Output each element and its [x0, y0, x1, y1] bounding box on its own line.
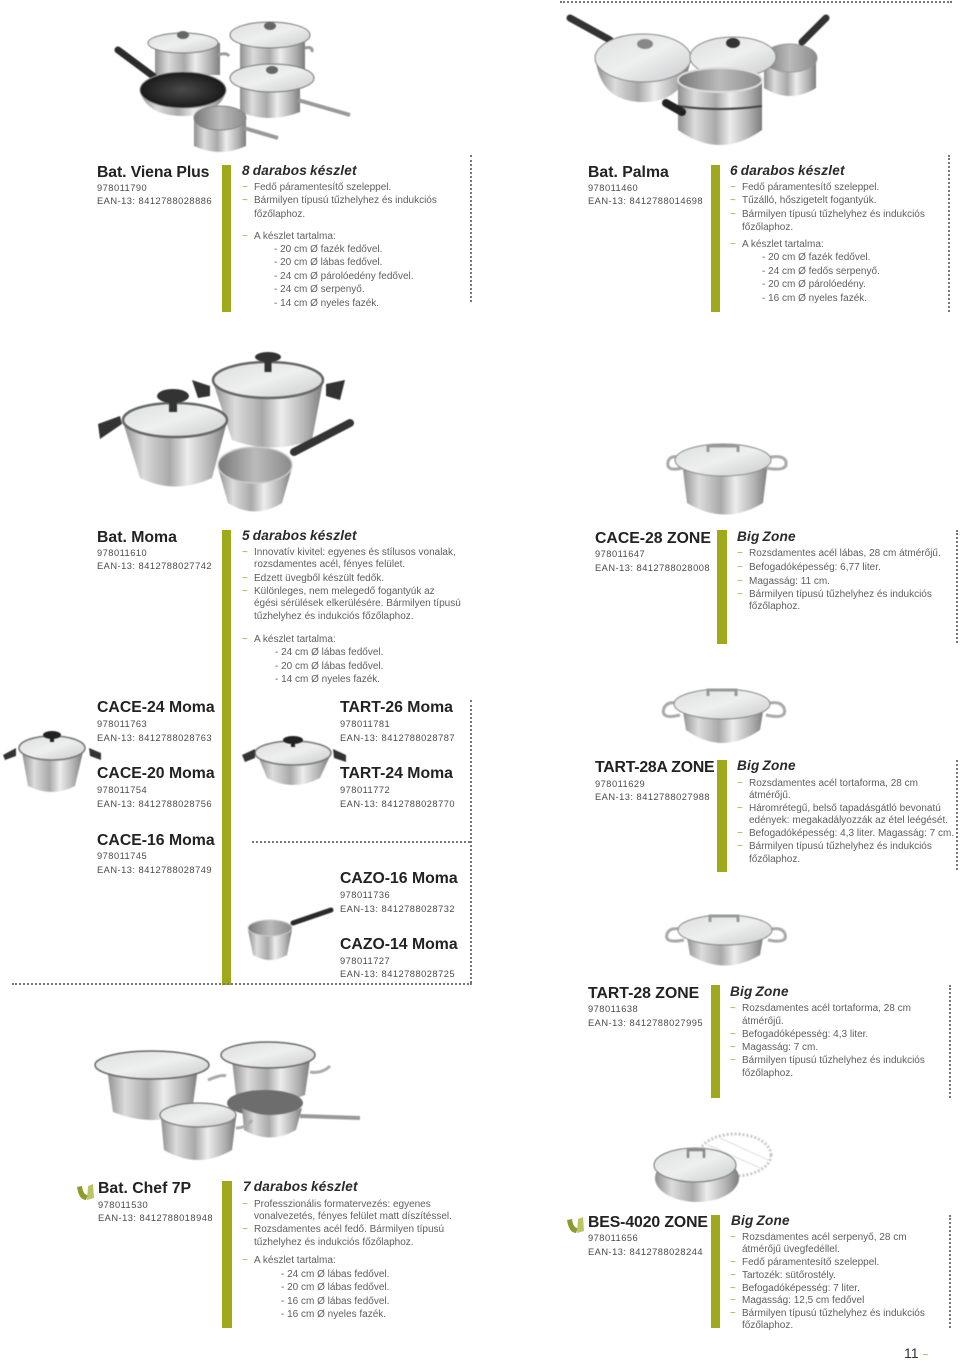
product description: ~: [737, 589, 743, 600]
product description: Fedő páramentesítő szeleppel.: [742, 1257, 879, 1268]
product: TART-26 Moma: 978011781: [340, 719, 390, 729]
product description: [737, 529, 941, 612]
product name and codes: Bat. Viena Plus: [97, 164, 209, 181]
product description: ~: [737, 828, 743, 839]
product: TART-24 Moma: EAN-13: 8412788028770: [340, 799, 455, 809]
product description: Bármilyen típusú tűzhelyhez és indukciós: [749, 841, 932, 852]
product: CACE-16 Moma: [97, 832, 215, 875]
set description: - 24 cm Ø lábas fedővel.: [275, 647, 383, 658]
product description: Befogadóképesség: 4,3 liter.: [742, 1029, 868, 1040]
product description: [731, 1212, 928, 1332]
product: CAZO-16 Moma: 978011736: [340, 890, 390, 900]
panel: TART-28A ZONE: [595, 758, 954, 872]
set description: - 20 cm Ø párolóedény.: [762, 279, 866, 290]
panel: Bat. Palma: [588, 163, 925, 312]
accent bar: [222, 165, 231, 312]
accent bar: [717, 760, 727, 872]
set description: Rozsdamentes acél fedő. Bármilyen típusú: [254, 1224, 444, 1235]
product: CACE-16 Moma: 978011745: [97, 851, 147, 861]
page number: 11 ~: [904, 1345, 928, 1361]
product description: Big Zone: [731, 1213, 790, 1228]
set description: ~: [730, 239, 736, 250]
icon: Chef 7P brand mark: [77, 1184, 94, 1200]
product description: Magasság: 7 cm.: [742, 1042, 818, 1053]
product: CAZO-16 Moma: EAN-13: 8412788028732: [340, 904, 455, 914]
product name and codes: 978011460: [588, 183, 638, 193]
product: TART-26 Moma: [340, 699, 455, 743]
product description: ~: [737, 576, 743, 587]
product name and codes: Bat. Chef 7P: [98, 1180, 191, 1197]
set description: ~: [730, 182, 736, 193]
product: TART-26 Moma: TART-26 Moma: [340, 699, 453, 716]
product description: ~: [730, 1029, 736, 1040]
set description: [242, 528, 461, 685]
product: TART-24 Moma: TART-24 Moma: [340, 765, 453, 782]
set description: tűzhelyhez és indukciós főzőlaphoz.: [254, 1237, 414, 1248]
set description: Fedő páramentesítő szeleppel.: [254, 182, 391, 193]
product: CAZO-16 Moma: [340, 870, 458, 914]
product name and codes: BES-4020 ZONE: [588, 1214, 708, 1231]
accent bar: [222, 530, 231, 985]
product: TART-24 Moma: 978011772: [340, 785, 390, 795]
image: Moma 5-piece cookware set: [97, 351, 355, 512]
set description: tűzhelyhez és indukciós főzőlaphoz.: [254, 611, 414, 622]
set description: 7 darabos készlet: [243, 1179, 358, 1194]
product: CACE-16 Moma: EAN-13: 8412788028749: [97, 865, 212, 875]
product name and codes: EAN-13: 8412788028244: [588, 1247, 703, 1257]
panel: BES-4020 ZONE: [588, 1212, 928, 1332]
product description: átmérőjű.: [742, 1016, 784, 1027]
product description: ~: [730, 1055, 736, 1066]
image: CACE-24 Moma pot: [2, 730, 102, 792]
set description: A készlet tartalma:: [254, 634, 336, 645]
product description: Befogadóképesség: 7 liter.: [742, 1283, 860, 1294]
image: TART-28A ZONE pan: [661, 688, 787, 744]
set description: Innovatív kivitel: egyenes és stílusos vonalak,: [254, 547, 456, 558]
product description: ~: [737, 841, 743, 852]
set description: ~: [242, 573, 248, 584]
product description: [737, 758, 954, 865]
image: TART-28 ZONE pan: [664, 914, 788, 966]
set description: Edzett üvegből készült fedők.: [254, 573, 384, 584]
product description: Bármilyen típusú tűzhelyhez és indukciós: [749, 589, 932, 600]
product description: Big Zone: [730, 984, 789, 999]
product name and codes: [588, 985, 703, 1028]
set description: - 16 cm Ø nyeles fazék.: [762, 293, 867, 304]
product description: Bármilyen típusú tűzhelyhez és indukciós: [742, 1055, 925, 1066]
product description: Magasság: 11 cm.: [749, 576, 830, 587]
product description: ~: [730, 1308, 736, 1319]
product description: ~: [737, 562, 743, 573]
product name and codes: [595, 759, 714, 802]
set description: A készlet tartalma:: [742, 239, 824, 250]
product: CACE-24 Moma: EAN-13: 8412788028763: [97, 733, 212, 743]
product description: ~: [730, 1003, 736, 1014]
product: CACE-16 Moma: CACE-16 Moma: [97, 832, 215, 849]
image: Palma 6-piece cookware set: [566, 14, 830, 146]
product description: ~: [730, 1232, 736, 1243]
accent bar: [222, 1181, 232, 1328]
accent bar: [711, 1215, 720, 1328]
product description: átmérőjű.: [749, 790, 791, 801]
product name and codes: Bat. Palma: [588, 164, 669, 181]
product: CACE-24 Moma: [97, 699, 215, 743]
product name and codes: TART-28A ZONE: [595, 759, 714, 776]
product name and codes: 978011530: [98, 1200, 148, 1210]
set description: Fedő páramentesítő szeleppel.: [742, 182, 879, 193]
set description: - 20 cm Ø lábas fedővel.: [274, 257, 382, 268]
product name and codes: [595, 530, 711, 573]
set description: - 24 cm Ø fedős serpenyő.: [762, 266, 880, 277]
product description: főzőlaphoz.: [749, 601, 800, 612]
product description: Rozsdamentes acél tortaforma, 28 cm: [742, 1003, 911, 1014]
set description: ~: [242, 1255, 248, 1266]
product name and codes: CACE-28 ZONE: [595, 530, 711, 547]
product name and codes: [97, 529, 212, 571]
icon: BES-4020 brand mark: [566, 1216, 586, 1234]
set description: ~: [242, 1224, 248, 1235]
product description: ~: [737, 803, 743, 814]
panel: Bat. Moma: [97, 528, 461, 985]
product description: Befogadóképesség: 4,3 liter. Magasság: 7 cm.: [749, 828, 954, 839]
set description: 5 darabos készlet: [242, 528, 357, 543]
set description: ~: [242, 634, 248, 645]
product: CAZO-14 Moma: EAN-13: 8412788028725: [340, 969, 455, 979]
product description: ~: [730, 1283, 736, 1294]
set description: ~: [242, 182, 248, 193]
set description: [242, 163, 437, 309]
set description: 6 darabos készlet: [730, 163, 845, 178]
image: BES-4020 ZONE roaster: [652, 1132, 773, 1202]
product description: Big Zone: [737, 758, 796, 773]
accent bar: [711, 165, 720, 312]
set description: Bármilyen típusú tűzhelyhez és indukciós: [742, 209, 925, 220]
product name and codes: 978011629: [595, 779, 645, 789]
product name and codes: EAN-13: 8412788027988: [595, 792, 710, 802]
product description: főzőlaphoz.: [742, 1320, 793, 1331]
product description: Rozsdamentes acél lábas, 28 cm átmérőjű.: [749, 548, 941, 559]
accent bar: [711, 985, 720, 1098]
set description: - 24 cm Ø lábas fedővel.: [281, 1269, 389, 1280]
set description: - 24 cm Ø serpenyő.: [274, 284, 365, 295]
accent bar: [717, 530, 727, 644]
product: CAZO-14 Moma: 978011727: [340, 956, 390, 966]
product: CACE-24 Moma: 978011763: [97, 719, 147, 729]
image: Viena Plus 8-piece cookware set: [114, 20, 351, 152]
product: TART-24 Moma: [340, 765, 455, 809]
set description: vonalvezetés, fényes felület matt díszítéssel.: [254, 1211, 452, 1222]
product: CACE-20 Moma: 978011754: [97, 785, 147, 795]
product: CAZO-16 Moma: CAZO-16 Moma: [340, 870, 458, 887]
product name and codes: 978011656: [588, 1233, 638, 1243]
set description: Tűzálló, hőszigetelt fogantyúk.: [742, 195, 877, 206]
set description: ~: [242, 547, 248, 558]
product description: edények: megakadályozzák az étel leégését.: [749, 815, 948, 826]
product name and codes: 978011647: [595, 549, 645, 559]
set description: ~: [242, 586, 248, 597]
product name and codes: [97, 164, 212, 206]
set description: A készlet tartalma:: [254, 231, 336, 242]
product name and codes: Bat. Moma: [97, 529, 177, 546]
image: CACE-28 ZONE pot: [666, 442, 788, 515]
panel: Bat. Chef 7P: [98, 1179, 452, 1328]
product: CACE-20 Moma: [97, 765, 215, 809]
product description: ~: [730, 1270, 736, 1281]
product description: ~: [730, 1042, 736, 1053]
product description: Rozsdamentes acél tortaforma, 28 cm: [749, 778, 918, 789]
set description: rozsdamentes acél, fényes felület.: [254, 559, 405, 570]
set description: - 20 cm Ø fazék fedővel.: [274, 244, 382, 255]
set description: Professzionális formatervezés: egyenes: [254, 1199, 431, 1210]
panel: Bat. Viena Plus: [97, 163, 437, 312]
set description: Bármilyen típusú tűzhelyhez és indukciós: [254, 195, 437, 206]
product name and codes: TART-28 ZONE: [588, 985, 699, 1002]
product name and codes: [98, 1180, 213, 1223]
product description: főzőlaphoz.: [749, 854, 800, 865]
set description: 8 darabos készlet: [242, 163, 357, 178]
product description: ~: [737, 548, 743, 559]
set description: [242, 1179, 452, 1320]
set description: főzőlaphoz.: [742, 222, 793, 233]
set description: ~: [730, 209, 736, 220]
product name and codes: 978011610: [97, 548, 147, 558]
set description: ~: [730, 195, 736, 206]
product name and codes: 978011790: [97, 183, 147, 193]
product description: Rozsdamentes acél serpenyő, 28 cm: [742, 1232, 907, 1243]
product description: ~: [737, 778, 743, 789]
product: CACE-20 Moma: EAN-13: 8412788028756: [97, 799, 212, 809]
product name and codes: EAN-13: 8412788028008: [595, 563, 710, 573]
product description: Bármilyen típusú tűzhelyhez és indukciós: [742, 1308, 925, 1319]
set description: - 24 cm Ø párolóedény fedővel.: [274, 271, 414, 282]
product description: Magasság: 12,5 cm fedővel: [742, 1295, 864, 1306]
product description: átmérőjű üvegfedéllel.: [742, 1244, 840, 1255]
set description: - 14 cm Ø nyeles fazék.: [274, 298, 379, 309]
set description: égési sérülések elkerülésére. Bármilyen típusú: [254, 598, 461, 609]
set description: - 16 cm Ø nyeles fazék.: [281, 1309, 386, 1320]
product name and codes: EAN-13: 8412788028886: [97, 196, 212, 206]
product description: Big Zone: [737, 529, 796, 544]
set description: ~: [242, 231, 248, 242]
product name and codes: EAN-13: 8412788014698: [588, 196, 703, 206]
set description: - 20 cm Ø lábas fedővel.: [275, 661, 383, 672]
product description: Tartozék: sütőrostély.: [742, 1270, 836, 1281]
product: TART-26 Moma: EAN-13: 8412788028787: [340, 733, 455, 743]
product description: ~: [730, 1295, 736, 1306]
set description: [730, 163, 925, 304]
product description: ~: [730, 1257, 736, 1268]
set description: ~: [242, 1199, 248, 1210]
product name and codes: 978011638: [588, 1004, 638, 1014]
product: CACE-24 Moma: CACE-24 Moma: [97, 699, 215, 716]
product name and codes: EAN-13: 8412788027995: [588, 1018, 703, 1028]
panel: TART-28 ZONE: [588, 984, 925, 1098]
set description: - 20 cm Ø fazék fedővel.: [762, 252, 870, 263]
product name and codes: [588, 164, 703, 206]
set description: ~: [242, 195, 248, 206]
product: CACE-20 Moma: CACE-20 Moma: [97, 765, 215, 782]
product name and codes: EAN-13: 8412788018948: [98, 1213, 213, 1223]
set description: - 14 cm Ø nyeles fazék.: [275, 674, 380, 685]
set description: Különleges, nem melegedő fogantyúk az: [254, 586, 435, 597]
image: Chef 7P cookware set: [94, 1040, 361, 1160]
set description: - 16 cm Ø lábas fedővel.: [281, 1296, 389, 1307]
product name and codes: EAN-13: 8412788027742: [97, 561, 212, 571]
product: CAZO-14 Moma: CAZO-14 Moma: [340, 936, 458, 953]
image: CAZO Moma saucepan: [247, 906, 334, 960]
product description: [730, 984, 925, 1079]
product: CAZO-14 Moma: [340, 936, 458, 979]
set description: - 20 cm Ø lábas fedővel.: [281, 1282, 389, 1293]
panel: CACE-28 ZONE: [595, 529, 941, 644]
product description: Háromrétegű, belső tapadásgátló bevonatú: [749, 803, 941, 814]
set description: A készlet tartalma:: [254, 1255, 336, 1266]
product description: főzőlaphoz.: [742, 1068, 793, 1079]
product name and codes: [588, 1212, 708, 1258]
product description: Befogadóképesség: 6,77 liter.: [749, 562, 881, 573]
set description: főzőlaphoz.: [254, 209, 305, 220]
image: TART-26 Moma pot: [242, 735, 347, 786]
